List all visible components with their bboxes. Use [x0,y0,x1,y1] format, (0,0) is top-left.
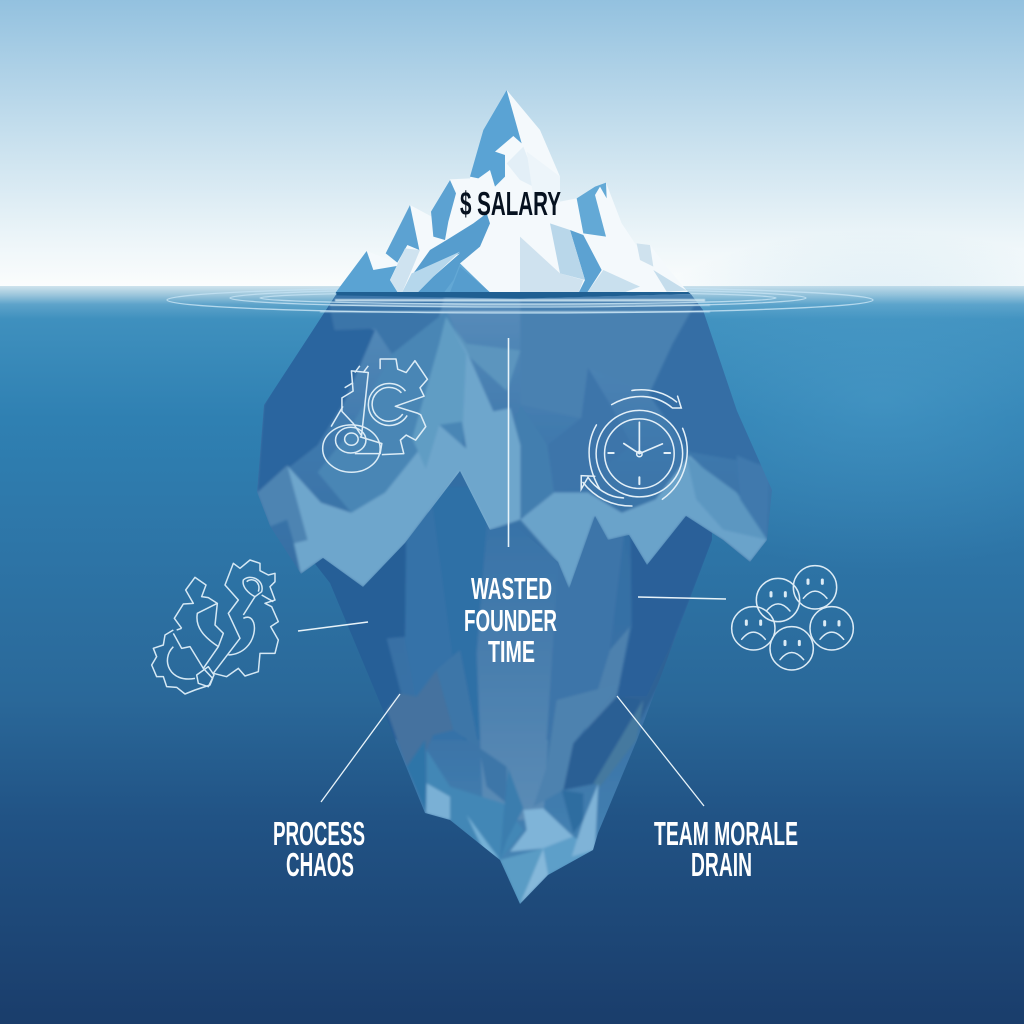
upper iceberg body [250,285,780,595]
sad face 1 [732,607,775,650]
water ripples [167,287,873,313]
label: team morale drain: TEAM MORALE [654,815,798,852]
sky background [0,0,1024,287]
sad face 2 [756,578,800,622]
surface light strips [320,299,710,312]
leader line: sad faces [638,597,726,599]
leader line: process chaos [321,694,400,802]
iceberg underwater mass [250,285,780,920]
label: wasted founder time: TIME [488,634,535,669]
leader line: team morale [617,696,704,806]
label: wasted founder time [464,571,557,669]
icon: tangled gears [152,560,278,694]
label: salary: $ SALARY [460,185,561,222]
label: team morale drain: DRAIN [691,846,752,883]
label: process chaos: PROCESS [273,815,365,852]
label: process chaos: CHAOS [286,846,354,883]
iceberg tip [335,90,691,299]
leader line: tangled gears [298,622,368,631]
icon: broken gear [323,359,427,472]
icon: sad faces [732,566,853,670]
label: team morale drain [654,815,798,883]
lower iceberg body [315,472,712,904]
label: wasted founder time: WASTED [471,571,552,606]
label: wasted founder time: FOUNDER [464,603,557,638]
ocean background [0,230,1024,1024]
icon: clock with cycle arrows [581,390,687,506]
sad face 4 [810,607,853,650]
sad face 5 [770,627,813,670]
label: process chaos [273,815,365,883]
sad face 3 [793,566,837,609]
leader line: wasted founder time [508,338,510,547]
